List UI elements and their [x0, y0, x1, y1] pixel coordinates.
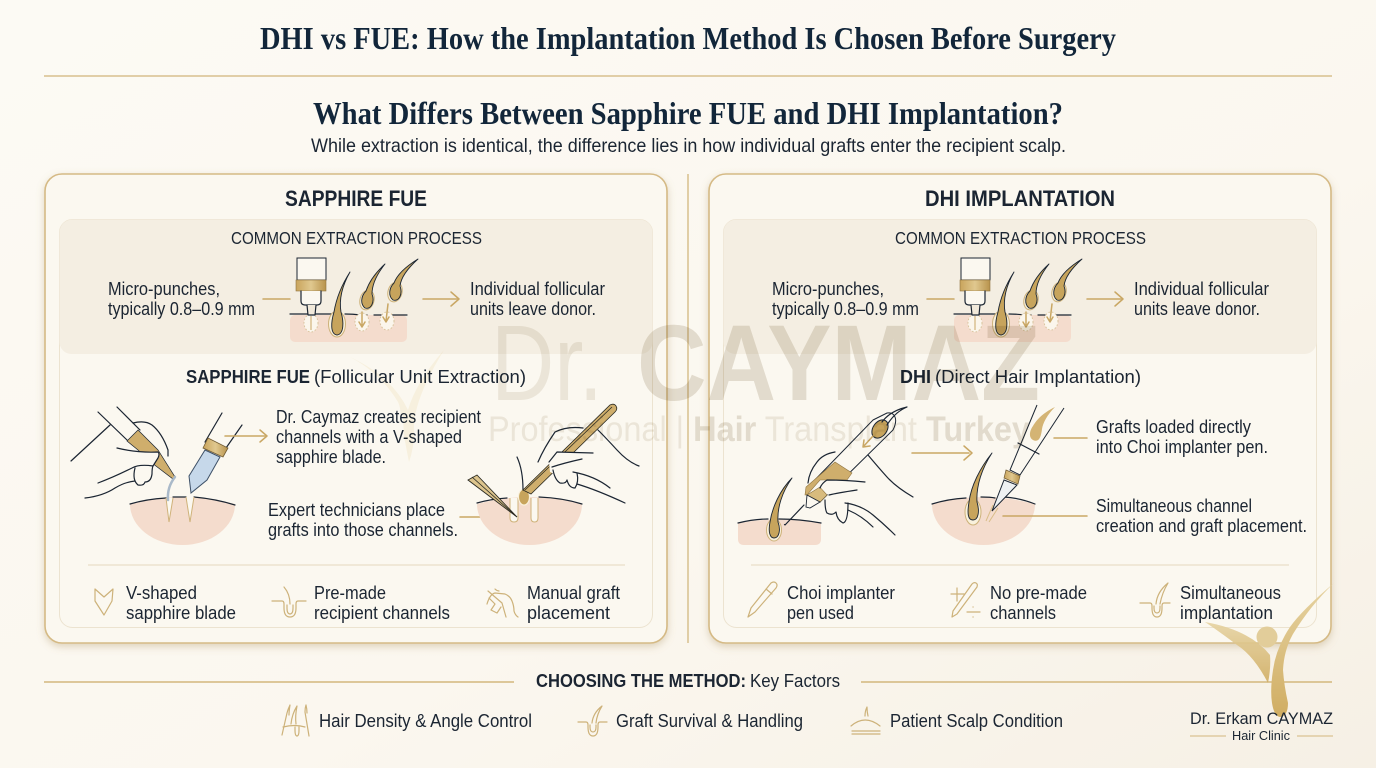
- extraction label left: Micro-punches,: [108, 279, 220, 299]
- blade callout: sapphire blade.: [276, 447, 386, 467]
- pen callout: into Choi implanter pen.: [1096, 437, 1268, 457]
- intro text: While extraction is identical, the difference lies in how individual grafts enter the recipient scalp.: [311, 135, 1066, 157]
- icon: no channels: [951, 583, 980, 617]
- extraction illustration: [290, 258, 418, 342]
- logo: Hair Clinic: [1232, 729, 1290, 743]
- extraction label left: typically 0.8–0.9 mm: [772, 299, 919, 319]
- icon: pen: [748, 582, 777, 617]
- illustration: sapphire blade channels: [71, 407, 242, 545]
- arrow: [451, 292, 459, 306]
- panel: DHI implantation: [709, 174, 1331, 643]
- factor: graft survival: [578, 706, 803, 736]
- method heading: (Follicular Unit Extraction): [314, 366, 526, 387]
- arrow: [260, 430, 267, 442]
- factor: scalp condition: [851, 707, 1063, 734]
- feature: simultaneous implantation: implantation: [1180, 603, 1273, 623]
- method heading: SAPPHIRE FUE: [186, 366, 310, 387]
- panel heading: SAPPHIRE FUE: [285, 186, 427, 211]
- factor: hair density: [282, 705, 532, 736]
- blade callout: Dr. Caymaz creates recipient: [276, 407, 481, 427]
- technician callout: Expert technicians place: [268, 500, 445, 520]
- extraction label right: units leave donor.: [1134, 299, 1260, 319]
- feature: Choi pen: pen used: [787, 603, 854, 623]
- extraction label left: Micro-punches,: [772, 279, 884, 299]
- factor: hair density: Hair Density & Angle Control: [319, 710, 532, 731]
- extraction label left: typically 0.8–0.9 mm: [108, 299, 255, 319]
- logo text: Dr. Erkam CAYMAZ: [1190, 709, 1333, 728]
- illustration: simultaneous implantation: [932, 405, 1064, 545]
- footer heading: Key Factors: [750, 671, 840, 691]
- extraction label right: Individual follicular: [1134, 279, 1269, 299]
- feature: V-shaped blade: sapphire blade: [126, 603, 236, 623]
- panel heading: DHI IMPLANTATION: [925, 186, 1115, 211]
- pen callout: Grafts loaded directly: [1096, 417, 1251, 437]
- simultaneous callout: creation and graft placement.: [1096, 516, 1307, 536]
- title: DHI vs FUE: How the Implantation Method Is Chosen Before Surgery: [260, 21, 1116, 56]
- feature: no pre-made channels: No pre-made: [990, 583, 1087, 603]
- footer heading: CHOOSING THE METHOD:: [536, 671, 746, 691]
- blade callout: channels with a V-shaped: [276, 427, 462, 447]
- extraction label right: Individual follicular: [470, 279, 605, 299]
- feature: manual placement: Manual graft: [527, 583, 620, 603]
- logo: [1190, 583, 1334, 743]
- arrow: [964, 446, 972, 460]
- extraction label right: units leave donor.: [470, 299, 596, 319]
- illustration: Choi pen in hand: [738, 407, 913, 545]
- feature: V-shaped blade: V-shaped: [126, 583, 197, 603]
- section heading: What Differs Between Sapphire FUE and DHI Implantation?: [313, 96, 1063, 131]
- illustration: graft placement: [468, 404, 639, 545]
- feature: pre-made channels: Pre-made: [314, 583, 386, 603]
- watermark: [338, 302, 1040, 462]
- feature: manual placement: placement: [527, 603, 610, 623]
- simultaneous callout: Simultaneous channel: [1096, 496, 1252, 516]
- feature: simultaneous implantation: Simultaneous: [1180, 583, 1281, 603]
- watermark: Dr.: [491, 302, 603, 423]
- factor: scalp condition: Patient Scalp Condition: [890, 710, 1063, 731]
- method heading: (Direct Hair Implantation): [935, 366, 1141, 387]
- feature: Choi pen: Choi implanter: [787, 583, 895, 603]
- technician callout: grafts into those channels.: [268, 520, 458, 540]
- feature: no pre-made channels: channels: [990, 603, 1056, 623]
- icon: channel: [272, 587, 306, 617]
- method heading: DHI: [900, 366, 931, 387]
- watermark: Professional | Hair Transplant Turkey: [488, 410, 1030, 449]
- extraction illustration: [954, 258, 1082, 342]
- footer heading: [44, 671, 1332, 691]
- band heading: COMMON EXTRACTION PROCESS: [895, 228, 1146, 248]
- factor: graft survival: Graft Survival & Handling: [616, 710, 803, 731]
- watermark: CAYMAZ: [637, 302, 1040, 423]
- icon: hair: [1140, 583, 1170, 617]
- icon: hand: [487, 589, 518, 617]
- feature: pre-made channels: recipient channels: [314, 603, 450, 623]
- band heading: COMMON EXTRACTION PROCESS: [231, 228, 482, 248]
- arrow: [1115, 292, 1123, 306]
- icon: V blade: [95, 589, 113, 615]
- panel: sapphire FUE: [45, 174, 667, 643]
